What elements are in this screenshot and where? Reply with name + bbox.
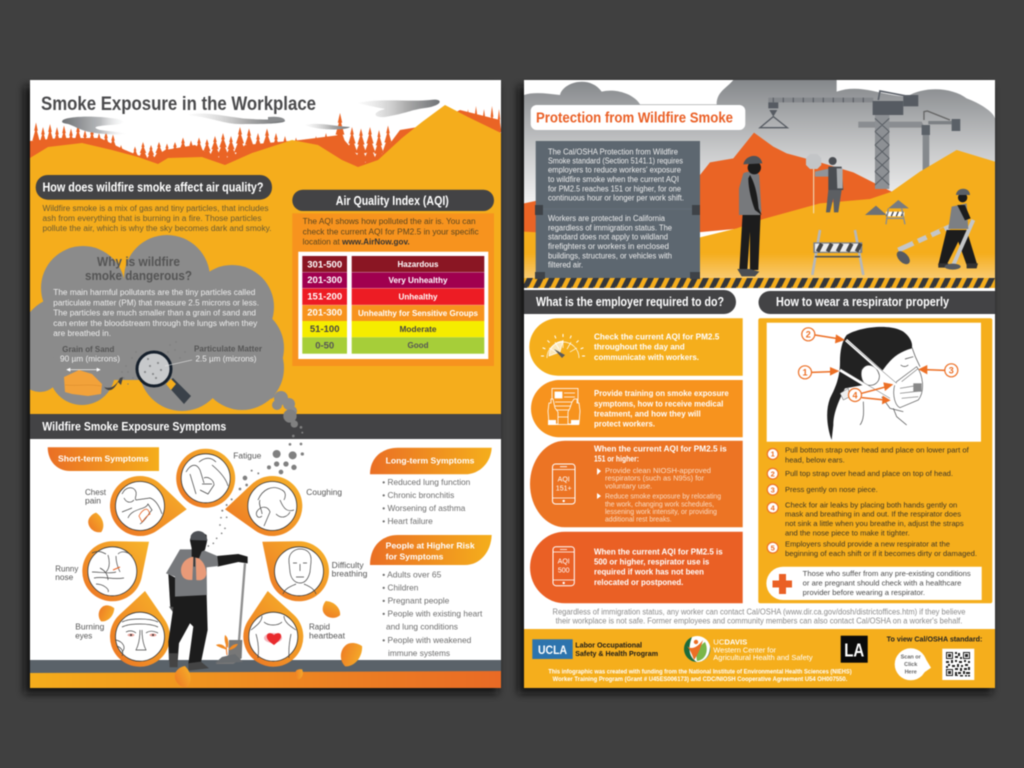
instructions text — [785, 446, 977, 558]
step numbers: 5 — [771, 543, 775, 552]
step: provide training: Provide training on smoke exposure — [594, 388, 729, 398]
step: provide training: symptoms, how to receive medical — [594, 398, 723, 408]
instructions text: Employers should provide a new respirator at the — [785, 540, 950, 549]
table: AQI scale: 201-300 — [307, 275, 342, 286]
tag: short-term symptoms — [48, 447, 159, 471]
symptom: coughing — [225, 476, 342, 536]
logo: LA — [841, 636, 868, 663]
tag: long-term symptoms: Long-term Symptoms — [386, 456, 475, 466]
panel shadows — [24, 86, 992, 694]
callout arrows — [812, 334, 945, 404]
step: AQI 151 or higher: lessening work intensity, or providing — [605, 507, 717, 516]
tag: people at higher risk: for Symptoms — [386, 551, 444, 561]
step: AQI 151 or higher: the work, changing work schedules, — [605, 499, 714, 508]
table: AQI scale: Hazardous — [398, 260, 439, 269]
worker: flagger — [806, 154, 843, 213]
symptom: rapid heartbeat: heartbeat — [309, 631, 346, 640]
yellow hills — [30, 105, 501, 414]
crane: near — [760, 91, 918, 189]
symptom: runny nose: Runny — [55, 565, 78, 574]
sign: Cal/OSHA standard: to wildfire smoke when the current AQI — [548, 175, 679, 184]
list: people at higher risk — [382, 569, 483, 658]
tag: people at higher risk — [370, 535, 492, 565]
orange mountain — [523, 132, 892, 233]
symptom: difficulty breathing: breathing — [332, 570, 367, 579]
step: provide training: treatment, and how they will — [594, 408, 701, 418]
step numbers: 3 — [771, 485, 775, 494]
instructions text: head, below ears. — [785, 455, 845, 464]
funding statement — [548, 669, 852, 683]
note: pre-existing conditions: or are pregnant should check with a healthcare — [803, 579, 961, 588]
table: AQI scale: 201-300 — [307, 308, 342, 318]
sign: Cal/OSHA standard: continuous hour or longer per work shift. — [548, 193, 684, 202]
yellow ground — [524, 150, 995, 279]
text: to view standard: To view Cal/OSHA standard: — [887, 636, 982, 643]
text: AQI description: The AQI shows how polluted the air is. You can — [303, 217, 476, 226]
table: AQI scale: Good — [408, 341, 429, 350]
symptom: chest pain — [85, 476, 187, 536]
text: contact Cal/OSHA: their workplace is not safe. Former employees and community members can also contact Cal/OSHA on a worker's behalf. — [556, 617, 962, 626]
instructions text: and the nose piece to make it tighter. — [785, 528, 910, 537]
logo: UC Davis: Western Center for — [713, 647, 777, 654]
text: particulate matter explanation: can enter the bloodstream through the lungs when they — [53, 319, 257, 328]
heading: AQI — [292, 190, 494, 211]
speech bubble: scan or click here: Scan or — [901, 655, 922, 661]
symptom: fatigue: Fatigue — [233, 451, 262, 460]
heading band: wildfire smoke exposure symptoms — [30, 414, 501, 439]
text: contact Cal/OSHA — [552, 607, 966, 626]
list: people at higher risk: • People with existing heart — [382, 609, 483, 619]
icon: phone AQI 500: 500 — [558, 568, 570, 575]
note: pre-existing conditions: provider before wearing a respirator. — [803, 588, 925, 597]
instructions text: mask and breathing in and out. If the respirator does — [785, 510, 961, 519]
step: AQI 151 or higher — [530, 441, 743, 527]
note: pre-existing conditions: Those who suffer from any pre-existing conditions — [803, 569, 971, 578]
heading: how does wildfire smoke affect air quality: How does wildfire smoke affect air quality? — [42, 181, 264, 195]
logo: UC Davis: Agricultural Health and Safety — [713, 655, 813, 662]
sign: Cal/OSHA standard: firefighters or workers in enclosed — [548, 242, 669, 251]
ground strip — [30, 660, 501, 688]
sign: Cal/OSHA standard: Smoke standard (Section 5141.1) requires — [548, 156, 683, 165]
text: particulate matter explanation: The particles are much smaller than a grain of sand and — [53, 309, 256, 318]
text: AQI description: check the current AQI for PM2.5 in your specific — [303, 227, 479, 236]
text: wildfire smoke description: Wildfire smoke is a mix of gas and tiny particles, that includes — [42, 204, 268, 213]
cloud: why is wildfire smoke dangerous — [10, 235, 297, 416]
title: protection from wildfire smoke — [531, 105, 745, 130]
step: check the current AQI: communicate with workers. — [594, 352, 699, 362]
icon: phone AQI 500: AQI — [558, 559, 570, 566]
step: check the current AQI: Check the current AQI for PM2.5 — [594, 331, 720, 341]
heading: AQI: Air Quality Index (AQI) — [336, 194, 449, 208]
worker with shovel — [166, 531, 248, 671]
panel: protection from wildfire smoke — [524, 80, 995, 688]
step: AQI 151 or higher: Reduce smoke exposure by relocating — [605, 492, 721, 501]
step: provide training — [531, 380, 743, 437]
heading: what is the employer required to do — [524, 290, 736, 314]
table: AQI scale: 51-100 — [310, 324, 339, 335]
callout numbers — [798, 328, 958, 402]
table: AQI scale — [298, 252, 488, 359]
sign: Cal/OSHA standard: for PM2.5 reaches 151 or higher, for one — [548, 184, 682, 193]
panel: respirator instructions — [758, 318, 992, 603]
instructions text: Press gently on nose piece. — [785, 485, 878, 494]
text: AQI description — [303, 217, 479, 247]
logo: LA: LA — [844, 640, 864, 660]
sign: Cal/OSHA standard — [535, 141, 700, 279]
text: particulate matter explanation: The main harmful pollutants are the tiny particles called — [53, 288, 255, 297]
sign: Cal/OSHA standard: standard does not apply to wildland — [548, 233, 668, 242]
symptom: chest pain: pain — [85, 497, 101, 506]
panel: air quality index — [292, 190, 494, 366]
icon: phone AQI 151+ — [552, 464, 575, 504]
list: people at higher risk: immune systems — [388, 648, 450, 658]
forest of trees — [29, 106, 502, 168]
construction scene — [524, 80, 995, 279]
symptom: burning eyes: Burning — [75, 623, 104, 632]
logo: UCLA: UCLA — [538, 645, 567, 657]
list: long-term symptoms — [382, 477, 471, 526]
step: AQI 500 or higher: 500 or higher, respirator use is — [594, 557, 710, 567]
text: wildfire smoke description — [42, 204, 272, 233]
step: AQI 500 or higher: required if work has not been — [594, 567, 704, 577]
step: AQI 151 or higher: When the current AQI for PM2.5 is — [594, 443, 727, 453]
logo: UCLA: Labor Occupational — [575, 642, 642, 649]
heading: why is wildfire smoke dangerous — [85, 254, 192, 283]
magnifying glass with particles — [127, 350, 192, 404]
tag: short-term symptoms: Short-term Symptoms — [58, 454, 149, 464]
particulate matter label: 2.5 µm (microns) — [196, 355, 257, 364]
table: AQI scale: Moderate — [400, 325, 437, 334]
table: AQI scale: Very Unhealthy — [388, 276, 448, 285]
text: wildfire smoke description: ash from everything that is burning in a fire. Those particles — [42, 214, 262, 223]
heading: why is wildfire smoke dangerous: Why is wildfire — [97, 254, 180, 269]
heading: why is wildfire smoke dangerous: smoke dangerous? — [85, 268, 192, 283]
table: AQI scale: 0-50 — [315, 340, 334, 352]
instructions text: Pull top strap over head and place on top of head. — [785, 469, 953, 478]
sign: Cal/OSHA standard: Workers are protected in California — [548, 214, 666, 223]
text: particulate matter explanation — [53, 288, 259, 338]
worker: foreground — [737, 156, 762, 276]
sign: Cal/OSHA standard: filtered air. — [548, 261, 583, 270]
step: AQI 151 or higher: 151 or higher: — [594, 454, 639, 464]
logo: UCLA: Safety & Health Program — [575, 651, 658, 658]
symptom: burning eyes: eyes — [75, 631, 92, 640]
heading: what is the employer required to do: What is the employer required to do? — [536, 295, 724, 309]
instructions text: Pull bottom strap over head and place on lower part of — [785, 446, 970, 455]
logo: UC Davis: UCDAVIS — [713, 639, 748, 646]
list: people at higher risk: and lung conditions — [386, 622, 458, 632]
particulate matter label — [194, 345, 262, 364]
symptom: runny nose — [55, 541, 149, 601]
instructions text: Check for air leaks by placing both hands gently on — [785, 500, 957, 509]
funding statement: Worker Training Program (Grant # U45ES006173) and CDC/NIOSH Cooperative Agreement U54 OH007550. — [553, 677, 848, 683]
step: AQI 500 or higher: relocated or postponed. — [594, 577, 683, 587]
speech bubble: scan or click here: Click — [904, 662, 918, 668]
title: protection from wildfire smoke: Protection from Wildfire Smoke — [536, 110, 733, 127]
step: check the current AQI — [529, 318, 743, 376]
symptom: rapid heartbeat — [243, 591, 346, 667]
grain of sand: 90 µm (microns) — [60, 355, 120, 364]
icon: phone AQI 151+: 151+ — [556, 486, 572, 493]
crane: far — [858, 111, 960, 179]
smoke streaks — [62, 100, 440, 134]
heading: how to wear a respirator properly: How to wear a respirator properly — [776, 295, 949, 309]
list: people at higher risk: • Children — [382, 582, 419, 592]
step numbers: 1 — [771, 450, 775, 459]
illustration: person wearing respirator — [767, 323, 981, 442]
list: long-term symptoms: • Worsening of asthma — [382, 503, 466, 513]
step: AQI 151 or higher: respirators (such as N95s) for — [605, 474, 705, 483]
sprout and leaves — [88, 513, 368, 688]
step: AQI 151 or higher: Provide clean NIOSH-approved — [605, 466, 711, 475]
list: long-term symptoms: • Reduced lung function — [382, 477, 471, 487]
icon: document and hands — [548, 388, 580, 425]
title: Smoke Exposure in the Workplace — [41, 94, 316, 115]
tag: long-term symptoms — [370, 448, 492, 474]
hazard stripe — [524, 278, 995, 288]
list: people at higher risk: • People with weakened — [382, 635, 472, 645]
list: long-term symptoms: • Chronic bronchitis — [382, 490, 454, 500]
grain of sand: Grain of Sand — [62, 345, 114, 354]
worker: carrying barricade — [894, 189, 978, 270]
list: people at higher risk: • Adults over 65 — [382, 569, 442, 579]
list: long-term symptoms: • Heart failure — [382, 516, 433, 526]
step: AQI 151 or higher: additional rest breaks. — [605, 515, 672, 524]
heading: how to wear a respirator properly — [758, 291, 995, 314]
smoke clouds and sky — [524, 80, 995, 208]
heading band: wildfire smoke exposure symptoms: Wildfire Smoke Exposure Symptoms — [42, 420, 227, 434]
sign: Cal/OSHA standard: The Cal/OSHA Protection from Wildfire — [548, 147, 679, 156]
table: AQI scale: 151-200 — [307, 292, 342, 302]
table: AQI scale: Unhealthy — [398, 292, 438, 302]
table: AQI scale: 301-500 — [307, 260, 342, 270]
particulate matter label: Particulate Matter — [194, 345, 262, 354]
note: pre-existing conditions — [766, 567, 982, 600]
sign: Cal/OSHA standard: regardless of immigration status. The — [548, 223, 673, 232]
footer — [524, 629, 995, 688]
QR code — [942, 649, 974, 680]
tag: people at higher risk: People at Higher Risk — [386, 540, 475, 550]
sign: Cal/OSHA standard: buildings, structures, or vehicles with — [548, 251, 672, 260]
panel: smoke exposure in the workplace — [10, 80, 504, 688]
grain of sand — [60, 345, 123, 396]
sign: Cal/OSHA standard: employers to reduce workers' exposure — [548, 166, 682, 175]
illustration: person wearing respirator: 1 — [802, 368, 808, 378]
rising smoke dots — [207, 409, 304, 547]
step numbers — [767, 449, 778, 553]
symptom: burning eyes — [75, 591, 170, 667]
barricades and gravel — [812, 200, 909, 275]
table: AQI scale: Unhealthy for Sensitive Groups — [358, 309, 479, 318]
step numbers: 4 — [771, 503, 776, 512]
step: AQI 500 or higher: When the current AQI for PM2.5 is — [594, 546, 723, 556]
symptom: coughing: Coughing — [306, 488, 342, 497]
speech bubble: scan or click here: Here — [905, 670, 917, 676]
step: AQI 151 or higher: voluntary use. — [605, 482, 652, 491]
icon: phone AQI 151+: AQI — [558, 477, 570, 484]
illustration: person wearing respirator: 4 — [852, 390, 858, 400]
instructions text: not sink a little when you breathe in, adjust the straps — [785, 519, 964, 528]
symptom: difficulty breathing — [262, 541, 367, 601]
step: check the current AQI: throughout the day and — [594, 342, 685, 352]
funding statement: This infographic was created with funding from the National Institute of Environmental Health Sciences (NIEHS) — [548, 669, 852, 675]
symptom: chest pain: Chest — [85, 488, 107, 497]
illustration: person wearing respirator: 3 — [949, 366, 954, 376]
icon: AQI gauge — [541, 334, 585, 358]
instructions text: beginning of each shift or if it becomes dirty or damaged. — [785, 549, 977, 558]
illustration: person wearing respirator: 2 — [806, 330, 811, 340]
step: provide training: protect workers. — [594, 419, 655, 429]
symptom: runny nose: nose — [55, 573, 74, 582]
icon: medical cross — [772, 574, 792, 594]
list: people at higher risk: • Pregnant people — [382, 596, 450, 606]
step: AQI 500 or higher — [530, 532, 743, 603]
text: particulate matter explanation: are breathed in. — [53, 329, 111, 338]
symptom: fatigue — [176, 449, 262, 508]
logo: UC Davis — [684, 636, 813, 662]
text: AQI description: location at www.AirNow.gov. — [303, 238, 410, 247]
speech bubble: scan or click here — [895, 648, 931, 680]
text: particulate matter explanation: particulate matter (PM) that measure 2.5 microns or less. — [53, 298, 259, 307]
text: wildfire smoke description: pollute the air, which is why the sky becomes dark and smoky. — [42, 224, 272, 233]
text: contact Cal/OSHA: Regardless of immigration status, any worker can contact Cal/OSHA (www.dir.ca.gov/dosh/districtoffices.htm) if they believe — [552, 607, 966, 616]
heading: how does wildfire smoke affect air quality — [36, 175, 272, 200]
symptom: difficulty breathing: Difficulty — [332, 561, 364, 570]
step numbers: 2 — [771, 469, 775, 478]
symptom: rapid heartbeat: Rapid — [309, 623, 330, 632]
logo: UCLA — [532, 639, 658, 659]
icon: phone AQI 500 — [553, 547, 574, 586]
